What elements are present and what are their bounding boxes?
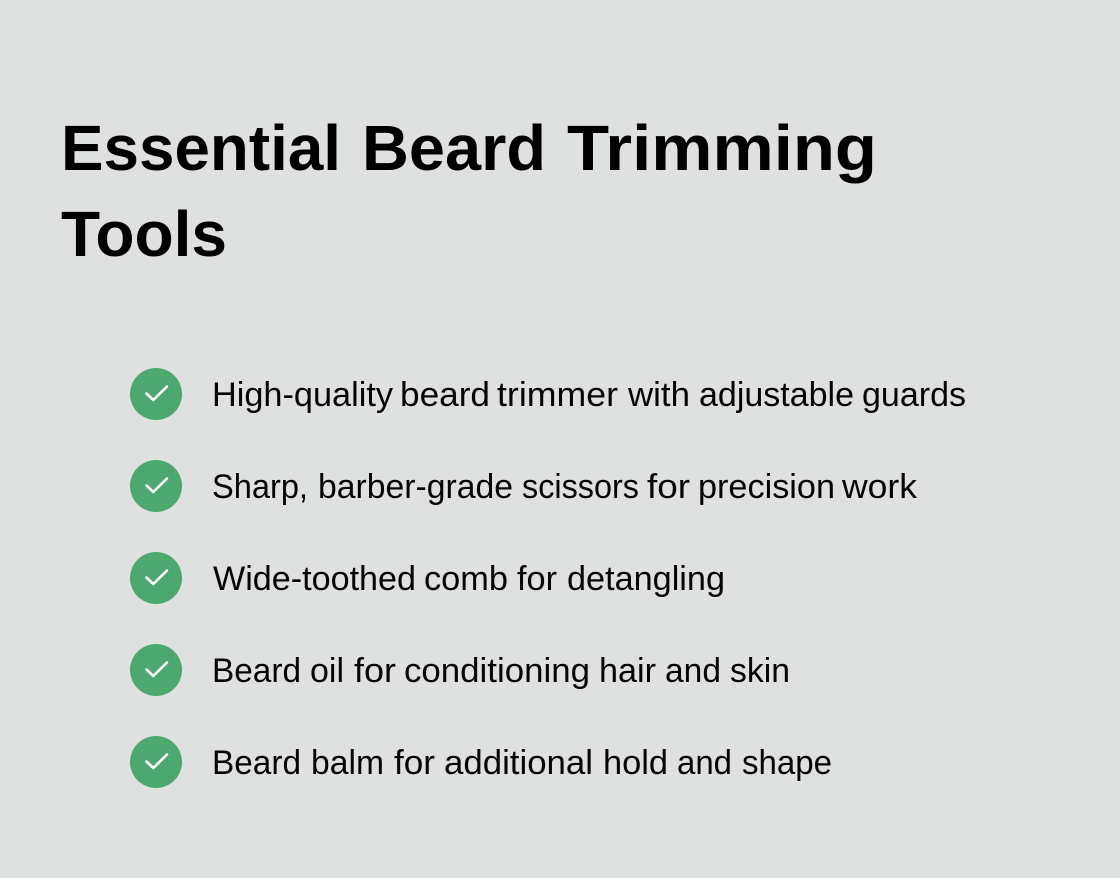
item: beard balm: for <box>394 744 435 782</box>
item: scissors: for <box>647 468 690 506</box>
item: beard oil: oil <box>310 652 344 690</box>
item: beard balm: balm <box>311 744 384 782</box>
title <box>61 112 877 270</box>
item: scissors: scissors <box>522 468 639 506</box>
item: beard trimmer: adjustable <box>699 376 854 414</box>
item: beard oil: Beard <box>212 652 301 690</box>
item: beard oil: and <box>665 652 721 690</box>
title: Trimming <box>567 112 877 184</box>
item: beard trimmer: beard <box>400 376 490 414</box>
item: beard trimmer: guards <box>862 376 966 414</box>
checklist <box>130 368 966 788</box>
item: scissors: precision <box>698 468 835 506</box>
item: beard balm: additional <box>444 744 593 782</box>
item: beard oil: skin <box>730 652 790 690</box>
item: beard balm <box>130 736 832 788</box>
item: scissors: Sharp, <box>212 468 308 506</box>
item: beard trimmer: High-quality <box>212 376 393 414</box>
item: beard trimmer <box>130 368 966 420</box>
item: scissors <box>130 460 918 512</box>
item: beard oil: for <box>354 652 396 690</box>
title: Tools <box>61 198 227 270</box>
item: beard oil <box>130 644 790 696</box>
item: beard balm: shape <box>742 744 832 782</box>
item: comb: detangling <box>567 560 725 598</box>
item: beard oil: conditioning <box>404 652 590 690</box>
item: beard trimmer: trimmer <box>497 376 618 414</box>
title: Essential <box>61 112 341 184</box>
item: beard oil: hair <box>599 652 656 690</box>
item: scissors: barber-grade <box>318 468 513 506</box>
item: beard trimmer: with <box>627 376 690 414</box>
item: beard balm: Beard <box>212 744 301 782</box>
item: comb: for <box>517 560 557 598</box>
item: comb: Wide-toothed <box>213 560 416 598</box>
item: scissors: work <box>841 468 918 506</box>
item: beard balm: and <box>677 744 732 782</box>
title: Beard <box>362 112 546 184</box>
item: comb <box>130 552 725 604</box>
item: beard balm: hold <box>603 744 668 782</box>
item: comb: comb <box>424 560 508 598</box>
